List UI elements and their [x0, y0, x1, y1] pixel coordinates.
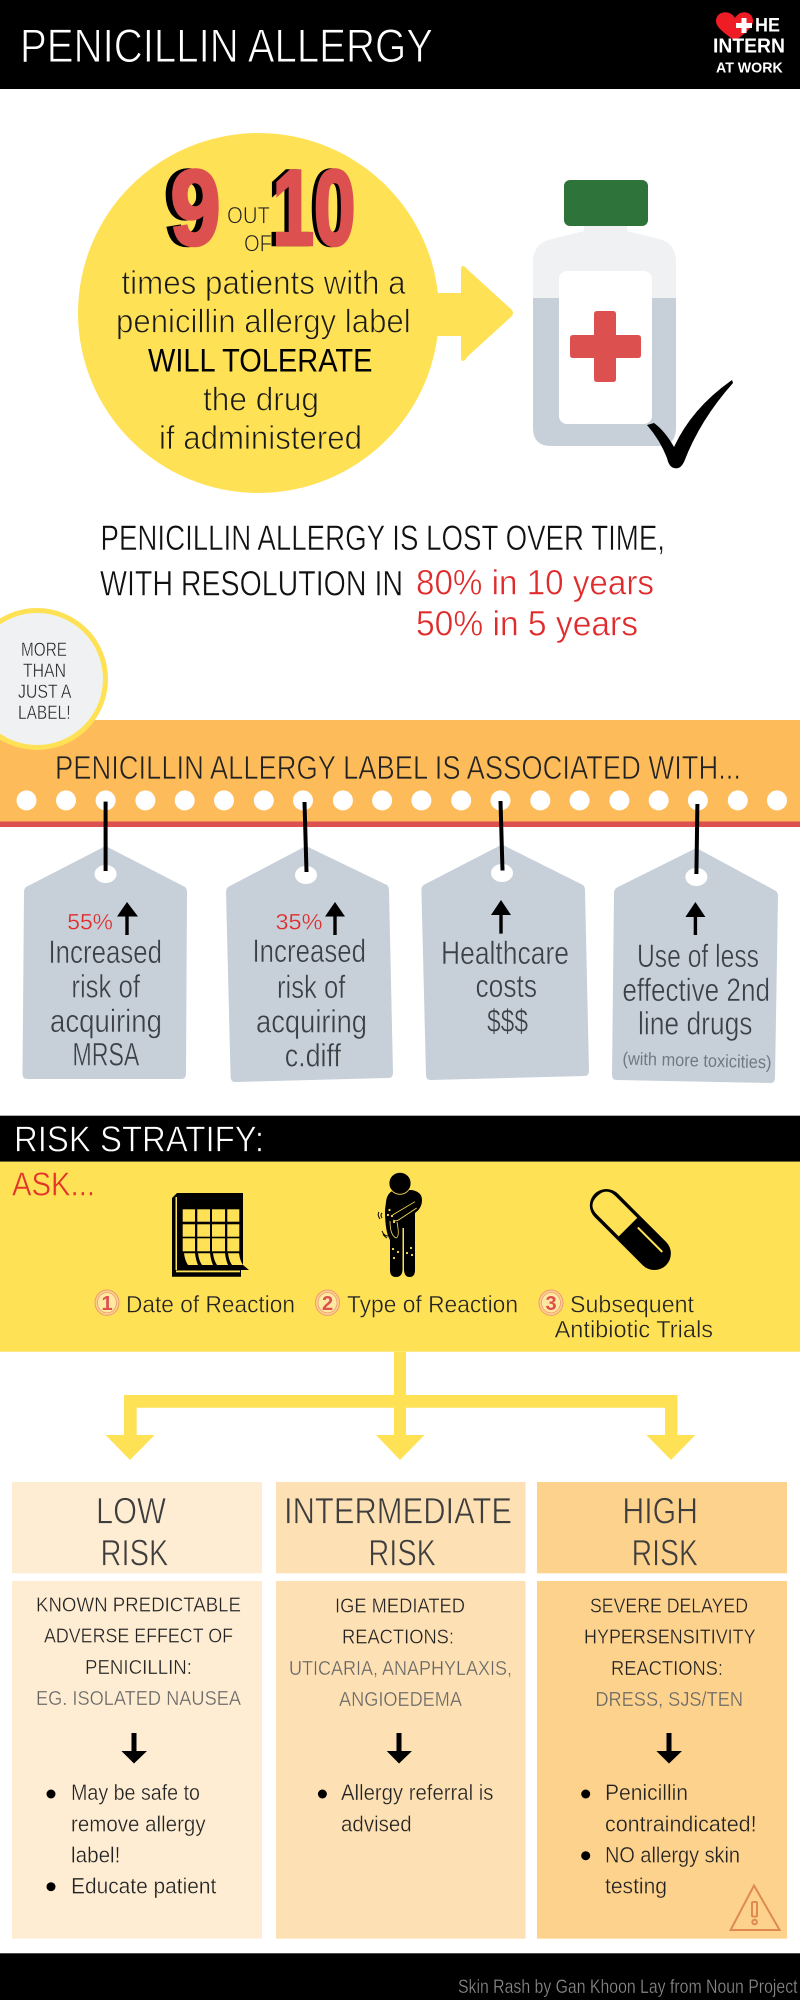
logo: The Intern at Work: AT WORK — [716, 59, 783, 76]
intermediate risk description: UTICARIA, ANAPHYLAXIS, — [289, 1657, 512, 1680]
low risk description — [36, 1594, 241, 1710]
low risk actions — [46, 1780, 217, 1898]
section bar: risk stratify — [0, 1116, 800, 1162]
intermediate risk description: ANGIOEDEMA — [339, 1688, 462, 1711]
badge: more than just a label: THAN — [23, 661, 66, 682]
low risk heading: RISK — [100, 1533, 169, 1574]
arrow up — [325, 902, 345, 935]
high risk heading — [622, 1490, 698, 1574]
low risk description: KNOWN PREDICTABLE — [36, 1594, 241, 1617]
tag 2: c.diff: risk of — [277, 969, 345, 1005]
title: PENICILLIN ALLERGY — [20, 19, 433, 72]
intermediate risk actions: Allergy referral is — [341, 1780, 493, 1805]
tag 2: c.diff: Increased — [252, 933, 366, 969]
out of: OUT — [227, 202, 270, 229]
badge: more than just a label: JUST A — [18, 682, 72, 703]
intermediate risk heading — [284, 1490, 512, 1574]
tag 1: MRSA: risk of — [71, 968, 140, 1004]
logo: The Intern at Work: INTERN — [713, 35, 785, 57]
footer bar — [0, 1953, 800, 2000]
big number 9: 9 — [164, 149, 214, 267]
ask heading: ASK... — [12, 1166, 95, 1203]
icon: medicine bottle with check — [533, 180, 733, 468]
high risk actions — [581, 1780, 757, 1898]
resolution stats — [416, 564, 654, 644]
badge: more than just a label: LABEL! — [18, 703, 70, 724]
arrow down — [656, 1733, 682, 1764]
tag 3: healthcare costs: $$$ — [487, 1003, 528, 1039]
low risk description: EG. ISOLATED NAUSEA — [36, 1687, 241, 1710]
low risk actions: Educate patient — [71, 1873, 217, 1898]
arrow up — [491, 900, 511, 934]
badge: more than just a label: MORE — [21, 640, 67, 661]
high risk description: HYPERSENSITIVITY — [584, 1626, 756, 1649]
high risk heading: RISK — [632, 1533, 698, 1574]
arrow down — [121, 1733, 147, 1764]
arrow from circle to bottle — [430, 266, 513, 361]
text: allergy lost over time: WITH RESOLUTION IN — [100, 565, 403, 604]
tag 1: MRSA: acquiring — [50, 1003, 162, 1039]
header bar — [0, 0, 800, 89]
panel: intermediate risk — [276, 1482, 526, 1939]
tag 3: healthcare costs — [421, 801, 589, 1080]
circle statement: times patients with a — [121, 264, 406, 301]
resolution stats: 80% in 10 years — [416, 564, 654, 602]
high risk heading: HIGH — [622, 1490, 698, 1531]
question 3: 3 — [545, 1293, 557, 1315]
arrow up — [685, 902, 705, 935]
circle statement: if administered — [159, 419, 362, 456]
icon: calendar — [172, 1193, 249, 1277]
tag 1: MRSA: Increased — [48, 934, 162, 970]
low risk actions: May be safe to — [71, 1780, 200, 1805]
out of: OF — [244, 231, 272, 258]
question 3 — [539, 1290, 713, 1344]
logo: The Intern at Work: HE — [755, 15, 780, 37]
tag 3: healthcare costs: Healthcare — [441, 935, 569, 971]
arrow down — [387, 1733, 412, 1764]
check mark — [647, 380, 733, 468]
intermediate risk actions: advised — [341, 1812, 412, 1837]
text: allergy lost over time: PENICILLIN ALLERGY IS LOST OVER TIME, — [100, 519, 665, 558]
high risk actions: NO allergy skin — [605, 1842, 740, 1867]
circle statement: WILL TOLERATE — [148, 343, 372, 379]
tag 3: healthcare costs: costs — [476, 968, 537, 1004]
big number 9: 9 — [170, 149, 221, 267]
question 1: Date of Reaction — [126, 1292, 295, 1319]
panel: associated-with band — [0, 720, 800, 827]
icon: warning triangle — [731, 1886, 780, 1930]
panel: low risk — [12, 1482, 262, 1939]
tag 1: MRSA: MRSA — [72, 1037, 140, 1073]
tag 4: second line drugs: effective 2nd — [622, 972, 770, 1008]
tag 4: second line drugs: line drugs — [638, 1006, 752, 1042]
tag 4: second line drugs: Use of less — [637, 938, 759, 974]
question 2: 2 — [322, 1293, 333, 1315]
low risk heading — [96, 1490, 169, 1574]
panel: 9 out of 10 circle — [78, 133, 439, 493]
circle statement: the drug — [203, 381, 319, 418]
intermediate risk description: IGE MEDIATED — [335, 1595, 465, 1618]
question 3: Antibiotic Trials — [555, 1317, 713, 1344]
out of — [227, 202, 272, 258]
badge: more than just a label — [0, 610, 106, 748]
high risk actions: Penicillin — [605, 1780, 688, 1805]
high risk description: REACTIONS: — [611, 1657, 723, 1680]
icon: person with skin rash — [378, 1172, 422, 1277]
arrow up — [117, 902, 138, 935]
low risk actions: remove allergy — [71, 1812, 206, 1837]
tag 2: c.diff: 35% — [276, 909, 322, 934]
low risk actions: label! — [71, 1842, 120, 1867]
high risk actions: testing — [605, 1873, 667, 1898]
intermediate risk description — [289, 1595, 512, 1711]
arrows: branching to risk levels — [106, 1352, 695, 1460]
tag 2: c.diff: c.diff — [285, 1037, 341, 1073]
low risk heading: LOW — [96, 1490, 166, 1531]
panel: ask — [0, 1162, 800, 1352]
question 2: Type of Reaction — [347, 1292, 518, 1319]
low risk description: ADVERSE EFFECT OF — [44, 1625, 233, 1648]
high risk actions: contraindicated! — [605, 1812, 757, 1837]
tag 2: c.diff — [226, 802, 393, 1082]
intermediate risk actions — [318, 1780, 493, 1837]
tag 1: MRSA: 55% — [67, 909, 113, 934]
question 3: Subsequent — [570, 1292, 694, 1319]
high risk description: DRESS, SJS/TEN — [595, 1688, 743, 1711]
text: allergy lost over time — [100, 519, 665, 644]
logo: The Intern at Work — [713, 12, 785, 76]
section bar: risk stratify: RISK STRATIFY: — [14, 1119, 264, 1160]
high risk description — [584, 1595, 756, 1711]
circle statement: penicillin allergy label — [116, 303, 411, 340]
circle statement — [116, 264, 411, 456]
panel: high risk — [537, 1482, 787, 1939]
intermediate risk heading: RISK — [368, 1533, 436, 1574]
icon: capsule — [583, 1182, 678, 1277]
tag 2: c.diff: acquiring — [256, 1004, 367, 1040]
tag 4: second line drugs: (with more toxicities) — [622, 1049, 772, 1072]
question 1: 1 — [101, 1293, 113, 1315]
intermediate risk description: REACTIONS: — [342, 1626, 454, 1649]
intermediate risk heading: INTERMEDIATE — [284, 1490, 512, 1531]
resolution stats: 50% in 5 years — [416, 604, 638, 644]
high risk description: SEVERE DELAYED — [590, 1595, 748, 1618]
big number 10: 10 — [268, 148, 352, 268]
big number 10: 10 — [272, 150, 355, 268]
tag 4: second line drugs — [612, 804, 778, 1083]
low risk description: PENICILLIN: — [85, 1656, 192, 1679]
tag 1: MRSA — [22, 802, 187, 1079]
